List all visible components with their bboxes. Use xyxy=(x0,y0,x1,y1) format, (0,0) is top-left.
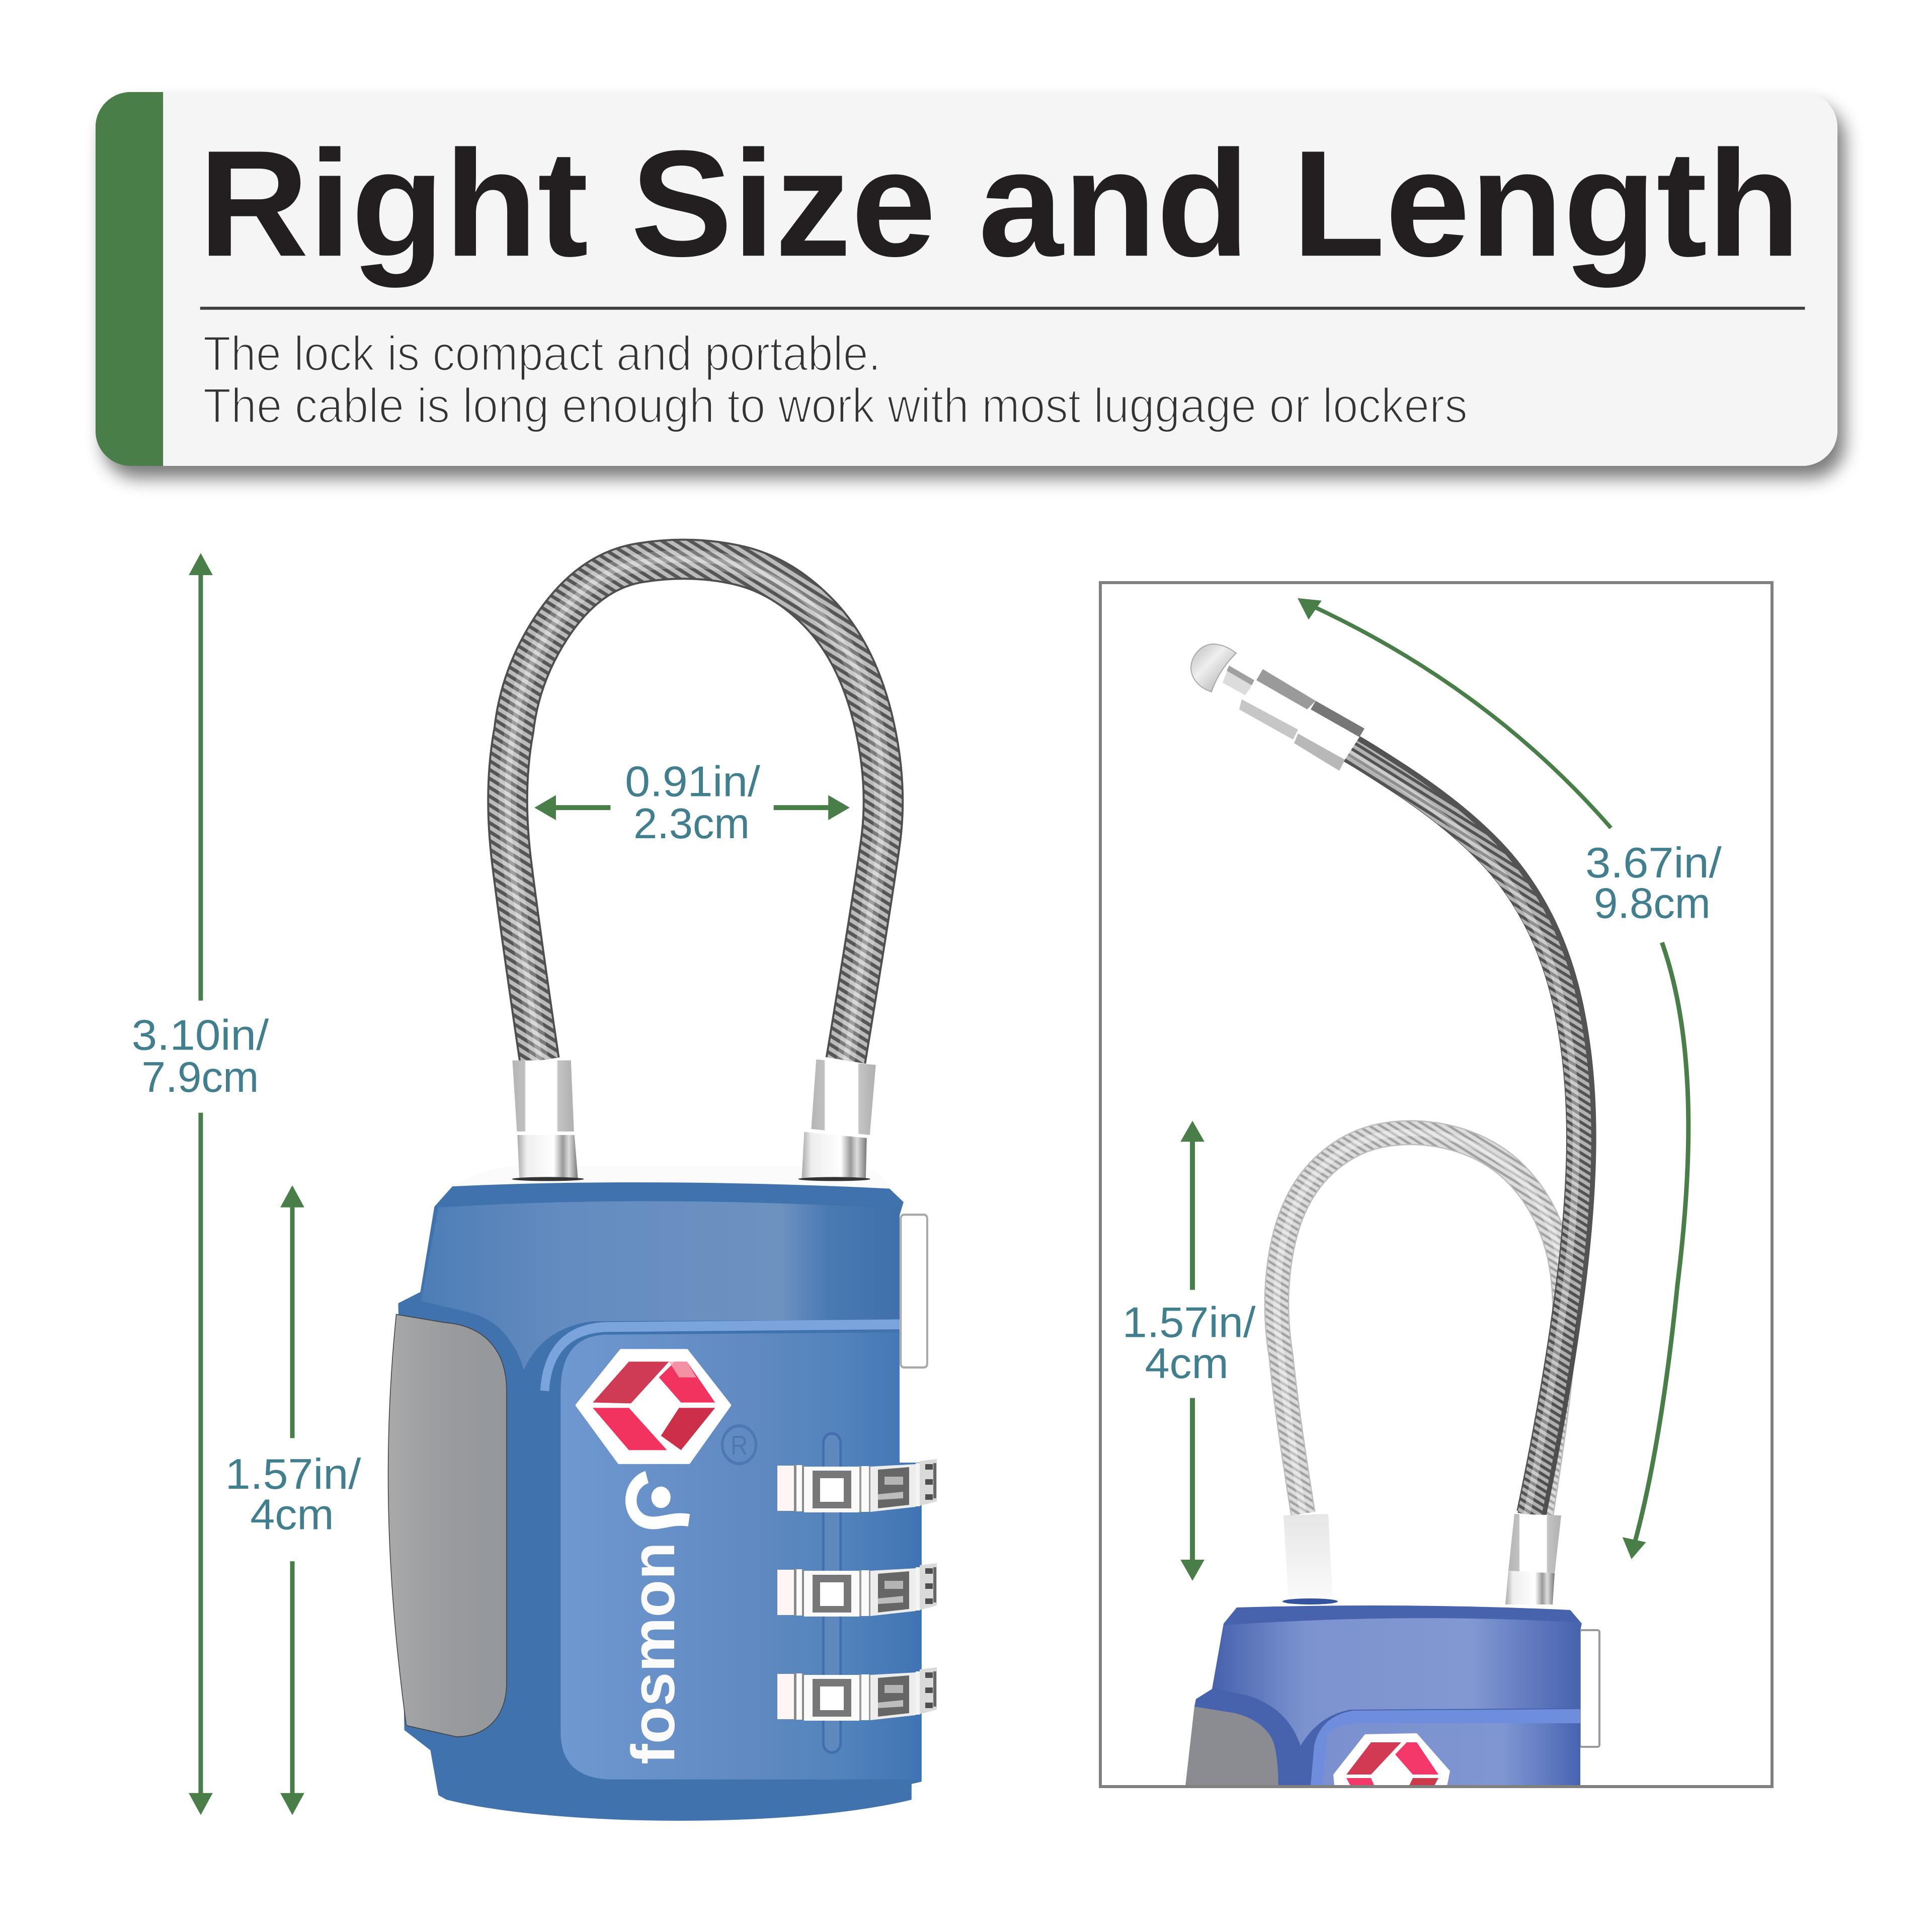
grip flange xyxy=(398,1303,527,1746)
dimension: body height 1.57in in panel: 4cm xyxy=(1145,1340,1229,1388)
combination dial 3 xyxy=(777,1667,937,1721)
description text: The cable is long enough to work with most luggage or lockers xyxy=(203,378,1468,433)
panel: open cable view xyxy=(1100,583,1772,1791)
registered mark: R xyxy=(731,1430,748,1461)
dimension: opening width 0.91in: 0.91in/ xyxy=(625,758,760,806)
lock: front view ferrules xyxy=(512,1060,876,1181)
upper face xyxy=(1214,1618,1580,1746)
extended dark cable xyxy=(1340,745,1581,1516)
top hole xyxy=(1282,1598,1338,1604)
body shell xyxy=(398,1182,922,1821)
highlight band xyxy=(1310,1709,1580,1791)
fosmon logo swirl xyxy=(631,1477,689,1523)
lock: front view body xyxy=(388,1166,927,1821)
cable tip and ferrules xyxy=(1191,644,1364,771)
dimension: cable length 3.67in: 3.67in/ xyxy=(1585,839,1722,887)
dimension: body height 1.57in: 1.57in/ xyxy=(225,1451,361,1498)
description text: The lock is compact and portable. xyxy=(203,326,881,381)
combination dial 1 xyxy=(777,1459,937,1512)
raised edge highlight xyxy=(545,1324,900,1391)
lock shell xyxy=(1185,1605,1582,1791)
combination dial 2 xyxy=(777,1563,937,1617)
TSA logo xyxy=(577,1350,730,1463)
lower ferrules xyxy=(1283,1514,1561,1604)
TSA logo cropped xyxy=(1333,1733,1450,1791)
dimension: cable length 3.67in xyxy=(1298,598,1722,1559)
dimension: body height 1.57in in panel: 1.57in/ xyxy=(1122,1299,1256,1346)
lower face xyxy=(1322,1723,1580,1791)
dimension: opening width 0.91in xyxy=(534,758,850,848)
registered mark xyxy=(722,1426,756,1464)
upper face xyxy=(421,1201,900,1373)
grey grip pad xyxy=(1185,1707,1278,1791)
dial slot xyxy=(823,1433,841,1752)
green accent bar xyxy=(96,92,163,466)
header card xyxy=(96,92,1845,478)
dimension: body height 1.57in: 4cm xyxy=(250,1491,334,1539)
dimension: body height 1.57in xyxy=(225,1185,361,1815)
lock: front view cable xyxy=(508,559,883,1061)
dimension: total height 3.10in: 7.9cm xyxy=(142,1054,259,1101)
top lid xyxy=(456,1166,888,1188)
dimension: total height 3.10in xyxy=(132,553,269,1815)
description text xyxy=(203,326,1468,433)
divider rule xyxy=(200,307,1805,310)
dimension: body height 1.57in in panel xyxy=(1122,1121,1256,1581)
title: Right Size and Length xyxy=(199,119,1800,289)
grey grip pad xyxy=(388,1315,507,1737)
dimension: opening width 0.91in: 2.3cm xyxy=(633,800,750,848)
latch xyxy=(901,1215,927,1367)
ghost closed cable xyxy=(1276,1133,1565,1514)
lower face xyxy=(560,1332,922,1780)
cut-off lock body xyxy=(1185,1598,1599,1791)
latch xyxy=(1580,1630,1599,1747)
fosmon wordmark: fosmon xyxy=(619,1542,687,1764)
dimension: total height 3.10in: 3.10in/ xyxy=(132,1011,269,1059)
dimension: cable length 3.67in: 9.8cm xyxy=(1594,880,1711,928)
